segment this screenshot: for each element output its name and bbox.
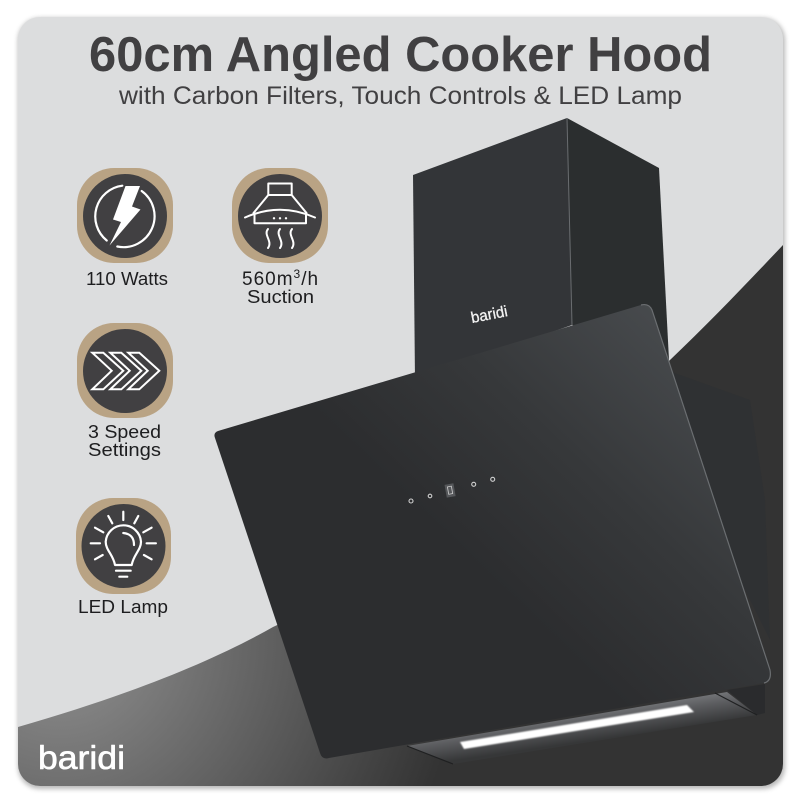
underside with LED	[407, 684, 765, 764]
label: 560m3/h Suction: 560m	[242, 269, 294, 290]
glass edge highlight	[641, 305, 770, 683]
label: 560m3/h Suction: /h	[301, 269, 319, 290]
icon: extractor hood	[232, 168, 328, 263]
icon: speed chevrons	[77, 323, 173, 418]
label: 3 Speed Settings	[88, 422, 161, 460]
label: 560m3/h Suction: Suction	[247, 287, 314, 307]
subtitle: with Carbon Filters, Touch Controls & LED Lamp	[118, 82, 682, 110]
touch controls	[409, 477, 495, 503]
dark swoosh	[18, 245, 783, 786]
label: 110 Watts: 110 Watts	[86, 269, 168, 289]
label: 560m3/h Suction	[242, 267, 319, 307]
chimney	[413, 118, 669, 380]
chimney logo: baridi	[470, 303, 509, 327]
label: LED Lamp: LED Lamp	[78, 597, 168, 617]
LED strip	[460, 705, 694, 749]
label: 3 Speed Settings: 3 Speed	[88, 422, 161, 442]
label: 560m3/h Suction: 3	[294, 267, 301, 281]
icon: LED bulb	[76, 498, 171, 594]
label: 3 Speed Settings: Settings	[88, 440, 161, 460]
brand logo: baridi	[38, 739, 125, 776]
title: 60cm Angled Cooker Hood	[89, 28, 712, 82]
glass panel	[214, 305, 770, 758]
shadow behind hood	[672, 372, 770, 640]
icon: power	[77, 168, 173, 263]
